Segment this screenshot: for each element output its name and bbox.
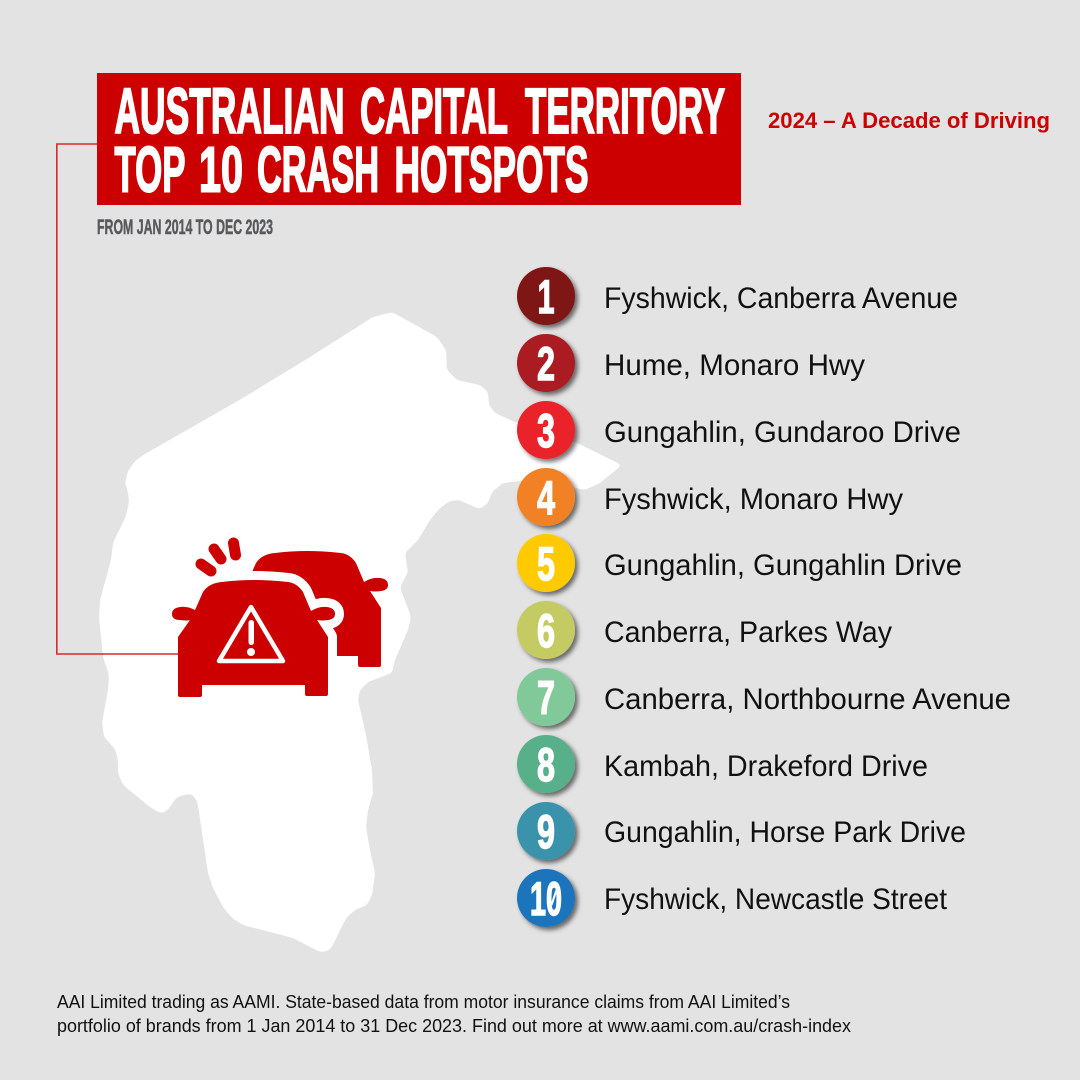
item 1: [517, 267, 958, 325]
item 10: [517, 869, 948, 927]
item 2: 2: [537, 337, 555, 390]
item 8: [517, 735, 928, 793]
footer note: portfolio of brands from 1 Jan 2014 to 31 Dec 2023. Find out more at www.aami.com.au/crash-index: [57, 1015, 852, 1036]
item 7: Canberra, Northbourne Avenue: [604, 683, 1011, 716]
icon: alert marks: [201, 543, 236, 571]
title line 2: CRASH: [257, 134, 379, 206]
connector line from title to car icon: [57, 144, 178, 654]
item 4: [517, 468, 903, 526]
item 5: [517, 534, 962, 592]
item 3: [517, 401, 961, 459]
item 6: Canberra, Parkes Way: [604, 616, 892, 649]
footer note: AAI Limited trading as AAMI. State-based data from motor insurance claims from AAI Limited’s: [57, 991, 790, 1012]
item 7: 7: [537, 671, 555, 724]
item 9: Gungahlin, Horse Park Drive: [604, 816, 966, 849]
item 7: [517, 668, 1011, 726]
item 2: Hume, Monaro Hwy: [604, 349, 865, 382]
item 8: 8: [537, 738, 555, 791]
item 10: Fyshwick, Newcastle Street: [604, 883, 948, 916]
item 3: Gungahlin, Gundaroo Drive: [604, 416, 961, 449]
icon: warning triangle: [219, 607, 283, 661]
item 1: Fyshwick, Canberra Avenue: [604, 282, 958, 315]
item 6: [517, 601, 892, 659]
item 9: 9: [537, 805, 555, 858]
item 5: Gungahlin, Gungahlin Drive: [604, 549, 962, 582]
item 4: 4: [537, 471, 555, 524]
title banner: [97, 73, 741, 206]
title line 2: TOP: [114, 134, 186, 206]
icon: rear car: [225, 551, 388, 668]
icon: front car: [172, 580, 335, 697]
icon: crashed cars with warning: [172, 543, 388, 697]
title line 1: CAPITAL: [360, 75, 508, 147]
title line 1: TERRITORY: [525, 75, 725, 147]
item 5: 5: [537, 537, 555, 590]
item 8: Kambah, Drakeford Drive: [604, 750, 928, 783]
ranked list of hotspots: [517, 267, 1011, 927]
subtitle: date range: FROM JAN 2014 TO DEC 2023: [97, 216, 273, 239]
footer note: [57, 991, 852, 1036]
title line 1: [114, 75, 725, 147]
item 9: [517, 802, 966, 860]
title line 2: 10: [199, 134, 243, 206]
title line 1: AUSTRALIAN: [114, 75, 344, 147]
item 4: Fyshwick, Monaro Hwy: [604, 483, 903, 516]
tagline: 2024 – A Decade of Driving: [768, 108, 1050, 133]
title line 2: HOTSPOTS: [394, 134, 588, 206]
title line 2: [114, 134, 588, 206]
map of the ACT: [99, 312, 622, 952]
item 2: [517, 334, 865, 392]
item 6: 6: [537, 604, 555, 657]
item 10: 10: [530, 872, 562, 925]
item 1: 1: [538, 270, 554, 323]
item 3: 3: [537, 404, 555, 457]
